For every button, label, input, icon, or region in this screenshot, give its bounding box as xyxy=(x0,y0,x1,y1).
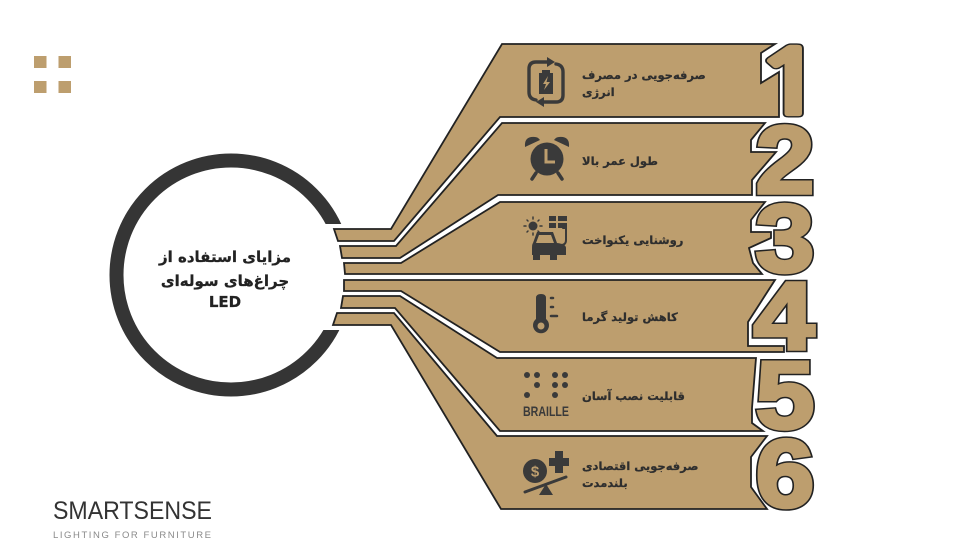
panel 2: long life xyxy=(340,107,814,258)
text: انرژی xyxy=(582,85,615,99)
title: چراغ‌های سوله‌ای xyxy=(161,272,289,291)
icon: braille xyxy=(523,372,569,419)
text: کاهش تولید گرما xyxy=(582,310,678,325)
number 6: 6 xyxy=(756,421,814,527)
number 4: 4 xyxy=(754,262,814,370)
icon: braille: BRAILLE xyxy=(523,403,569,419)
logo: Smartsense xyxy=(53,497,212,541)
number 4: 4 xyxy=(754,262,814,370)
number 3: 3 xyxy=(756,186,814,292)
number 2: 2 xyxy=(756,107,814,214)
text: صرفه‌جویی در مصرف xyxy=(582,68,706,83)
panel 6: long-term economy xyxy=(333,313,814,527)
title: LED xyxy=(209,293,241,311)
icon: money scale with plus xyxy=(523,451,569,495)
number 1: 1 xyxy=(753,39,828,127)
text: طول عمر بالا xyxy=(582,154,658,169)
icon: money scale with plus: $ xyxy=(531,464,540,480)
panel 3: uniform light xyxy=(344,186,814,292)
text: بلندمدت xyxy=(582,476,628,490)
number 2: 2 xyxy=(756,107,814,214)
text: قابلیت نصب آسان xyxy=(582,389,685,403)
number 6: 6 xyxy=(756,421,814,527)
number 5: 5 xyxy=(756,342,814,449)
decorative icon: four squares xyxy=(34,56,71,93)
text xyxy=(582,68,706,99)
text xyxy=(582,459,698,490)
number 3: 3 xyxy=(756,186,814,292)
number 1: 1 xyxy=(753,39,828,127)
icon: battery cycle xyxy=(529,57,563,107)
text: روشنایی یکنواخت xyxy=(582,233,683,248)
panel 1: energy saving xyxy=(334,39,828,241)
icon: alarm clock xyxy=(525,137,569,179)
logo: Smartsense: SMARTSENSE xyxy=(53,497,212,525)
logo: Smartsense: LIGHTING FOR FURNITURE xyxy=(53,530,211,541)
text: صرفه‌جویی اقتصادی xyxy=(582,459,698,474)
title xyxy=(158,248,291,311)
icon: sun, panels and car xyxy=(524,216,567,260)
central circle ring with title xyxy=(116,160,346,390)
panel 4: low heat xyxy=(344,262,814,370)
icon: thermometer xyxy=(533,294,557,333)
number 5: 5 xyxy=(756,342,814,449)
title: مزایای استفاده از xyxy=(158,248,291,266)
panel 5: easy installation xyxy=(341,296,814,449)
